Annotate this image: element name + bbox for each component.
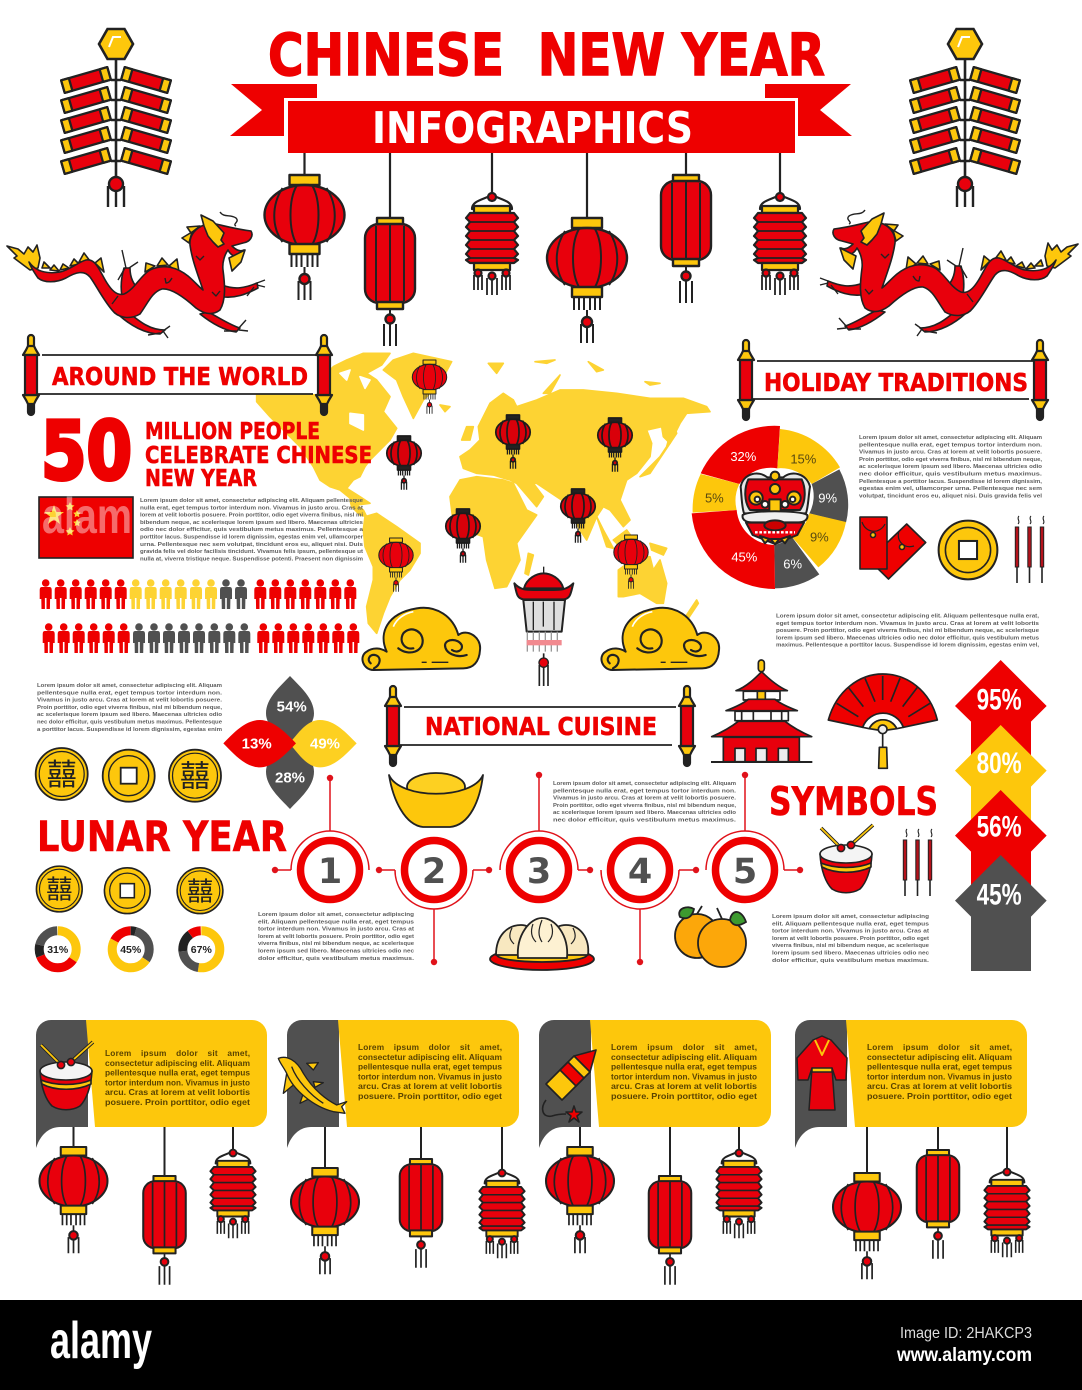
- card 1 text: tortor interdum non. Vivamus in justo: [105, 1077, 250, 1087]
- map lantern: africa: [446, 509, 480, 563]
- icon: oranges: [675, 906, 746, 967]
- donut 31%: 31%: [47, 944, 69, 956]
- text block: lunar year: a porttitor lacus. Suspendisse id lorem dignissim, egestas enim: [37, 727, 222, 733]
- step 4: 4: [628, 852, 652, 892]
- card 1 text: consectetur adipiscing elit. Aliquam: [105, 1058, 250, 1068]
- pie labels: 32%: [730, 449, 757, 464]
- pie labels: 45%: [731, 549, 758, 564]
- firecracker right: [910, 29, 1020, 207]
- lantern: round 2: [547, 218, 627, 343]
- million people heading: [145, 419, 372, 492]
- icon: gold ingot: [389, 773, 483, 827]
- arrow labels: 95%: [977, 684, 1022, 717]
- lantern: ribbed 2: [754, 193, 806, 295]
- text block: holiday traditions: pellentesque nulla erat, eget tempus tortor interdum non.: [859, 442, 1042, 448]
- pie labels: 9%: [810, 530, 829, 545]
- text block: bottom left of steps: [258, 912, 415, 962]
- text block: bottom right of steps: tortor interdum non. Vivamus in justo arcu. Cras at: [772, 929, 929, 935]
- text block: lunar year: Lorem ipsum dolor sit amet, consectetur adipiscing elit. Aliquam: [37, 683, 222, 689]
- text block: center top: nec dolor efficitur, quis vestibulum metus maximus.: [553, 818, 736, 824]
- text block: holiday traditions: [859, 435, 1042, 499]
- coins row 2: [36, 866, 223, 914]
- text block: below holiday traditions: eget tempus tortor interdum non. Vivamus in justo arcu. Cras at lorem at velit lobortis: [776, 621, 1040, 627]
- text block: below holiday traditions: maximus. Pellentesque a porttitor lacus. Suspendisse id lorem dignissim, egestas enim vel,: [776, 643, 1039, 649]
- scroll: around the world: [23, 335, 332, 415]
- donut 31%: [39, 931, 76, 968]
- petal labels: 28%: [275, 770, 305, 787]
- text block: bottom right of steps: Lorem ipsum dolor sit amet, consectetur adipiscing: [772, 914, 929, 920]
- lunar year heading: LUNAR YEAR: [37, 812, 287, 861]
- card 2 icon: carp: [278, 1057, 347, 1113]
- hanging lanterns strings: [304, 153, 780, 218]
- china flag: alam: [42, 488, 132, 544]
- icon: holiday coin: [939, 521, 997, 579]
- china flag: [39, 488, 133, 558]
- map lantern: atlantic: [387, 436, 421, 490]
- map lantern: north america: [412, 360, 447, 414]
- text block: million people: [140, 498, 364, 562]
- icon: symbols incense: [903, 829, 932, 896]
- timeline: numbered steps: [272, 772, 803, 965]
- arrow labels: [977, 684, 1022, 912]
- text block: bottom left of steps: tortor interdum non. Vivamus in justo arcu. Cras at: [258, 927, 414, 933]
- step 3: 3: [527, 852, 551, 892]
- heading: NATIONAL CUISINE: [425, 712, 657, 741]
- text block: center top: [553, 781, 736, 824]
- text block: below holiday traditions: Lorem ipsum dolor sit amet, consectetur adipiscing elit. Aliquam pellentesque nulla erat,: [776, 614, 1039, 620]
- arrow labels: 56%: [977, 810, 1022, 843]
- card 2: [278, 1020, 519, 1148]
- card 2 text: Lorem ipsum dolor sit amet,: [358, 1042, 502, 1052]
- card 2 text: tortor interdum non. Vivamus in justo: [358, 1071, 502, 1081]
- card 3 icon: rocket: [543, 1050, 596, 1122]
- banner ribbon: infographics: [230, 84, 852, 154]
- card 3 text: tortor interdum non. Vivamus in justo: [611, 1071, 757, 1081]
- card 3 text: [611, 1042, 757, 1101]
- card 4 text: arcu. Cras at lorem at velit lobortis: [867, 1081, 1012, 1091]
- symbols heading: SYMBOLS: [769, 780, 938, 825]
- step 2: 2: [422, 852, 446, 892]
- text block: million people: porttitor lacus. Suspendisse id lorem dignissim, egestas enim vel, ullamcorper: [140, 534, 364, 540]
- text block: bottom right of steps: dolor efficitur, quis vestibulum metus maximus.: [772, 958, 929, 964]
- text block: million people: odio nec dolor efficitur, quis vestibulum metus maximus. Pellentesque a: [140, 527, 364, 533]
- card 3: [539, 1020, 771, 1148]
- icon: lion head: [741, 472, 810, 544]
- pie labels: 9%: [818, 490, 837, 505]
- card 2 text: posuere. Proin porttitor, odio eget: [358, 1091, 502, 1101]
- text block: center top: Proin porttitor, odio eget viverra finibus, nisl mi bibendum neque,: [553, 803, 736, 809]
- icon: red envelopes: [860, 517, 926, 579]
- pie labels: 6%: [783, 556, 802, 571]
- pie labels: 15%: [790, 451, 817, 466]
- donut 45%: [112, 931, 149, 968]
- petal labels: 13%: [242, 736, 272, 753]
- scroll: holiday traditions: [738, 340, 1048, 420]
- card 4 icon: robe: [797, 1036, 847, 1110]
- card 3 text: pellentesque nulla erat, eget tempus: [611, 1062, 757, 1072]
- lantern: ribbed 1: [466, 193, 518, 295]
- pie chart: holiday traditions: [692, 426, 848, 589]
- text block: million people: bibendum neque, ac scelerisque lorem ipsum sed libero. Maecenas ultricies: [140, 520, 364, 526]
- icon: symbols drum: [820, 825, 873, 893]
- text block: holiday traditions: egestas enim vel, ullamcorper urna. Pellentesque nec sem: [859, 486, 1042, 492]
- petal chart: [223, 676, 357, 809]
- image id: Image ID: 2HAKCP3: [900, 1325, 1032, 1342]
- text block: bottom right of steps: lorem at velit lobortis posuere. Proin porttitor, odio eget: [772, 936, 929, 942]
- map lantern: europe: [496, 415, 530, 469]
- donut charts: [39, 931, 220, 968]
- dragon left: [7, 212, 265, 338]
- text block: holiday traditions: Vivamus in justo arcu. Cras at lorem at velit lobortis posuere.: [859, 450, 1042, 456]
- million people heading: MILLION PEOPLE: [145, 419, 320, 445]
- text block: center top: pellentesque nulla erat, eget tempus tortor interdum non.: [553, 788, 736, 794]
- text block: lunar year: pellentesque nulla erat, eget tempus tortor interdum non.: [37, 690, 222, 696]
- text block: holiday traditions: nec dolor efficitur, quis vestibulum metus maximus.: [859, 472, 1042, 478]
- card 3 text: Lorem ipsum dolor sit amet,: [611, 1042, 757, 1052]
- dragon right: [820, 210, 1078, 336]
- card 4 text: Lorem ipsum dolor sit amet,: [867, 1042, 1012, 1052]
- text block: bottom left of steps: viverra finibus, nisl mi bibendum neque, ac scelerisque: [258, 941, 415, 947]
- text block: bottom left of steps: dolor efficitur, quis vestibulum metus maximus.: [258, 956, 414, 962]
- card 4 lanterns: [833, 1150, 1030, 1279]
- text block: bottom left of steps: lorem at velit lobortis posuere. Proin porttitor, odio eget: [258, 934, 414, 940]
- world map: [257, 353, 710, 633]
- text block: million people: lorem at velit lobortis posuere. Proin porttitor, odio eget viverra finibus, nisl mi: [140, 513, 363, 519]
- step 1: 1: [318, 852, 342, 892]
- text block: below holiday traditions: posuere. Proin porttitor, odio eget viverra finibus, nisl mi bibendum neque, ac scelerisque: [776, 628, 1040, 634]
- text block: bottom right of steps: [772, 914, 930, 964]
- lantern: round 1: [264, 175, 344, 300]
- text block: million people: nulla erat, eget tempus tortor interdum non. Vivamus in justo arcu. Cras at: [140, 505, 363, 511]
- text block: bottom left of steps: lorem ipsum sed libero. Maecenas ultricies odio nec: [258, 948, 415, 954]
- card 2 text: [358, 1042, 502, 1101]
- card 4 text: pellentesque nulla erat, eget tempus: [867, 1062, 1012, 1072]
- cloud right: [601, 608, 719, 670]
- step 5: [716, 840, 774, 900]
- card 4 text: tortor interdum non. Vivamus in justo: [867, 1071, 1012, 1081]
- card 1 icon: drum: [40, 1042, 93, 1110]
- pagoda lantern: [514, 567, 573, 686]
- text block: bottom left of steps: elit. Aliquam pellentesque nulla erat, eget tempus: [258, 919, 415, 925]
- map lantern: china: [598, 418, 632, 472]
- card 4 text: [867, 1042, 1012, 1101]
- footer bar: [0, 1300, 1082, 1390]
- text block: lunar year: Proin porttitor, odio eget viverra finibus, nisl mi bibendum neque,: [37, 705, 222, 711]
- text block: holiday traditions: Proin porttitor, odio eget viverra finibus, nisl mi bibendum neque,: [859, 457, 1042, 463]
- heading: HOLIDAY TRADITIONS: [764, 368, 1028, 397]
- step 5: 5: [733, 852, 757, 892]
- step 4: [610, 840, 670, 900]
- cloud left: [362, 608, 480, 670]
- text block: lunar year: ac scelerisque lorem ipsum sed libero. Maecenas ultricies odio: [37, 712, 222, 718]
- website: www.alamy.com: [896, 1345, 1032, 1366]
- title: CHINESE NEW YEAR: [268, 21, 825, 89]
- text block: holiday traditions: volutpat, tincidunt eros eu, aliquet nisi. Duis gravida felis vel: [859, 493, 1042, 499]
- arrow labels: 45%: [977, 879, 1022, 912]
- people row 1: [40, 579, 356, 609]
- icon: holiday incense: [1015, 516, 1044, 583]
- card 4 text: posuere. Proin porttitor, odio eget: [867, 1091, 1012, 1101]
- text block: bottom right of steps: lorem ipsum sed libero. Maecenas ultricies odio nec: [772, 950, 930, 956]
- million people heading: CELEBRATE CHINESE: [145, 443, 372, 469]
- text block: bottom left of steps: Lorem ipsum dolor sit amet, consectetur adipiscing: [258, 912, 414, 918]
- text block: center top: Vivamus in justo arcu. Cras at lorem at velit lobortis posuere.: [553, 796, 736, 802]
- card 1 text: [105, 1048, 250, 1107]
- card 3 text: consectetur adipiscing elit. Aliquam: [611, 1052, 757, 1062]
- text block: holiday traditions: Lorem ipsum dolor sit amet, consectetur adipiscing elit. Aliquam: [859, 435, 1042, 441]
- card 3 lanterns: [546, 1147, 762, 1285]
- pie labels: [705, 449, 837, 571]
- card 3 text: posuere. Proin porttitor, odio eget: [611, 1091, 757, 1101]
- people row 2: [43, 623, 359, 653]
- card 1 text: Lorem ipsum dolor sit amet,: [105, 1048, 250, 1058]
- text block: holiday traditions: Pellentesque a porttitor lacus. Suspendisse id lorem dignissim,: [859, 479, 1042, 485]
- big number 50: 50: [41, 405, 132, 498]
- text block: million people: nulla at, viverra tristique neque. Suspendisse potenti. Praesent non dignissim: [140, 556, 363, 562]
- text block: bottom right of steps: viverra finibus, nisl mi bibendum neque, ac scelerisque: [772, 943, 930, 949]
- text block: below holiday traditions: [776, 614, 1040, 649]
- petal labels: 49%: [310, 736, 340, 753]
- banner text: INFOGRAPHICS: [372, 103, 693, 154]
- card 2 lanterns: [291, 1159, 525, 1274]
- card 1: [36, 1020, 267, 1148]
- lantern: tall 2: [661, 175, 711, 303]
- text block: holiday traditions: ac scelerisque lorem ipsum sed libero. Maecenas ultricies odio: [859, 464, 1042, 470]
- icon: fan: [828, 674, 937, 768]
- text block: below holiday traditions: lorem ipsum sed libero. Maecenas ultricies odio nec dolor efficitur, quis vestibulum metus: [776, 635, 1040, 641]
- card lantern strings: [74, 1127, 1007, 1176]
- icon: pagoda: [711, 660, 812, 762]
- arrow chart: [955, 660, 1047, 971]
- text block: center top: ac scelerisque lorem ipsum sed libero. Maecenas ultricies odio: [553, 810, 736, 816]
- pie labels: 5%: [705, 490, 724, 505]
- text block: lunar year: Vivamus in justo arcu. Cras at lorem at velit lobortis posuere.: [37, 698, 222, 704]
- card 3 text: arcu. Cras at lorem at velit lobortis: [611, 1081, 757, 1091]
- alamy logo: alamy: [50, 1312, 152, 1370]
- card 1 text: arcu. Cras at lorem at velit lobortis: [105, 1087, 250, 1097]
- donut 45%: 45%: [120, 944, 142, 956]
- icon: dumplings: [490, 918, 594, 970]
- coins row 1: [36, 748, 221, 802]
- card 4: [795, 1020, 1027, 1148]
- card 1 text: pellentesque nulla erat, eget tempus: [105, 1068, 250, 1078]
- lantern: tall 1: [365, 218, 415, 346]
- petal labels: 54%: [277, 698, 307, 715]
- heading: AROUND THE WORLD: [52, 362, 308, 391]
- arrow labels: 80%: [977, 747, 1022, 780]
- step 2: [404, 840, 464, 900]
- card 2 text: arcu. Cras at lorem at velit lobortis: [358, 1081, 502, 1091]
- text block: lunar year: nec dolor efficitur, quis vestibulum metus maximus. Pellentesque: [37, 720, 223, 726]
- scroll: national cuisine: [385, 686, 695, 766]
- donut 67%: [183, 931, 220, 968]
- card 2 text: consectetur adipiscing elit. Aliquam: [358, 1052, 502, 1062]
- million people heading: NEW YEAR: [145, 466, 257, 492]
- firecracker left: [61, 29, 171, 207]
- map lantern: india: [561, 489, 595, 543]
- map lantern: south america: [379, 538, 413, 592]
- donut 67%: 67%: [191, 944, 212, 956]
- card 1 text: posuere. Proin porttitor, odio eget: [105, 1097, 250, 1107]
- step 3: [510, 840, 568, 900]
- text block: million people: urna. Pellentesque nec sem volutpat, tincidunt eros eu, aliquet nisi. Duis: [140, 542, 364, 548]
- card 1 lanterns: [40, 1147, 256, 1285]
- map lantern: australia: [614, 535, 648, 589]
- text block: lunar year: [37, 683, 223, 733]
- petal labels: [242, 698, 340, 787]
- card 2 text: pellentesque nulla erat, eget tempus: [358, 1062, 502, 1072]
- step 1: [300, 840, 360, 900]
- text block: million people: gravida felis vel dolor facilisis tincidunt. Vivamus felis ipsum, pellentesque ut: [140, 549, 363, 555]
- text block: bottom right of steps: elit. Aliquam pellentesque nulla erat, eget tempus: [772, 921, 930, 927]
- card 4 text: consectetur adipiscing elit. Aliquam: [867, 1052, 1012, 1062]
- text block: million people: Lorem ipsum dolor sit amet, consectetur adipiscing elit. Aliquam pellentesque: [140, 498, 364, 504]
- text block: center top: Lorem ipsum dolor sit amet, consectetur adipiscing elit. Aliquam: [553, 781, 736, 787]
